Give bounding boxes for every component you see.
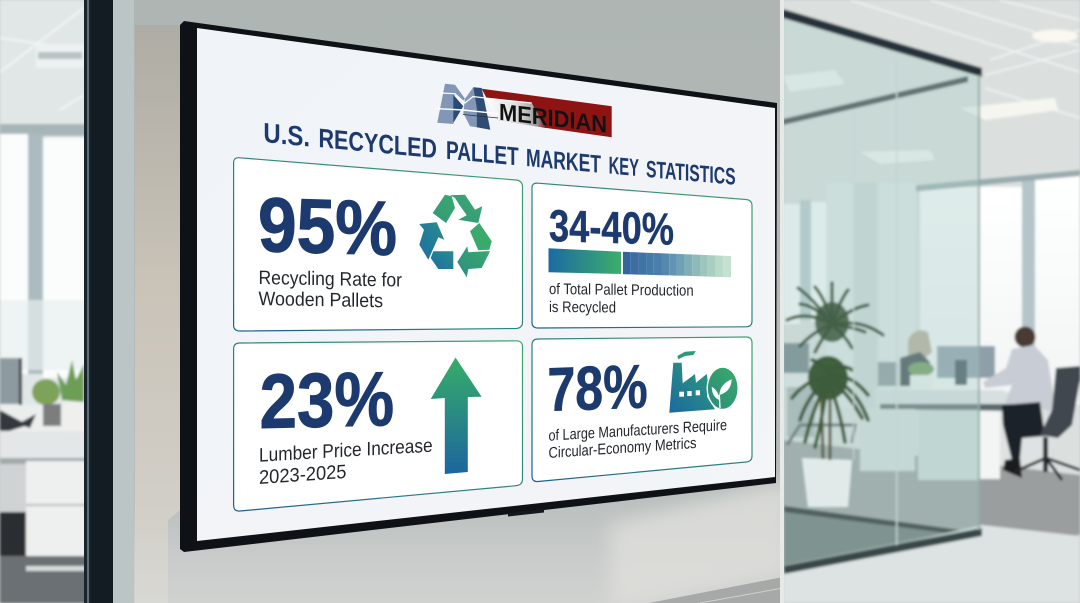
background: right glass office [783, 0, 1080, 603]
title [263, 117, 736, 191]
panel: share of production [532, 183, 752, 328]
silver fade behind wordmark [485, 98, 546, 128]
screen [197, 28, 775, 541]
title: RECYCLED [318, 123, 437, 164]
panel: lumber price [234, 341, 522, 511]
label: share of production: of Total Pallet Production [549, 281, 694, 300]
label: lumber price: 2023-2025 [259, 461, 347, 489]
logo: Meridian [437, 84, 612, 138]
label: recycling rate: Recycling Rate for [258, 267, 402, 292]
title: U.S. [263, 117, 310, 153]
panel: recycling rate [234, 158, 522, 331]
title: KEY [609, 152, 639, 182]
TV display [180, 21, 777, 552]
stat: 34-40%: 34-40% [549, 200, 674, 255]
label: share of production [549, 281, 694, 317]
label: recycling rate: Wooden Pallets [258, 288, 383, 312]
glass partition frame [783, 9, 982, 574]
title: STATISTICS [646, 157, 736, 191]
label: share of production: is Recycled [549, 299, 616, 317]
glass partition tint [783, 10, 980, 572]
background: monitors and desk [860, 346, 1050, 480]
background: potted plant [787, 283, 883, 507]
background: seated man and chair [983, 326, 1080, 480]
title: MARKET [526, 144, 601, 179]
label: lumber price [259, 435, 433, 489]
panel: manufacturers [532, 337, 752, 482]
wordmark: MERIDIAN [499, 99, 607, 138]
background: woman at desk [878, 330, 932, 386]
label: recycling rate [258, 267, 402, 312]
wall corner edge [780, 0, 784, 603]
icon: recycling arrows [419, 195, 492, 277]
stand button [508, 509, 544, 516]
stat: 95%: 95% [258, 182, 397, 272]
door frame [84, 0, 115, 603]
bezel [180, 21, 777, 552]
red banner [482, 89, 612, 137]
icon: up arrow [431, 358, 482, 474]
label: manufacturers [548, 417, 727, 462]
label: manufacturers: Circular-Economy Metrics [548, 435, 697, 462]
stat: 23%: 23% [260, 356, 394, 445]
title: PALLET [446, 137, 519, 171]
progress bar [548, 248, 731, 277]
M mark [437, 84, 532, 130]
wall [113, 0, 790, 603]
background: left office seen through doorway [0, 0, 90, 603]
label: lumber price: Lumber Price Increase [259, 435, 433, 467]
label: manufacturers: of Large Manufacturers Require [548, 417, 727, 445]
icon: factory with leaf [669, 351, 739, 413]
stat: 78%: 78% [547, 353, 648, 425]
